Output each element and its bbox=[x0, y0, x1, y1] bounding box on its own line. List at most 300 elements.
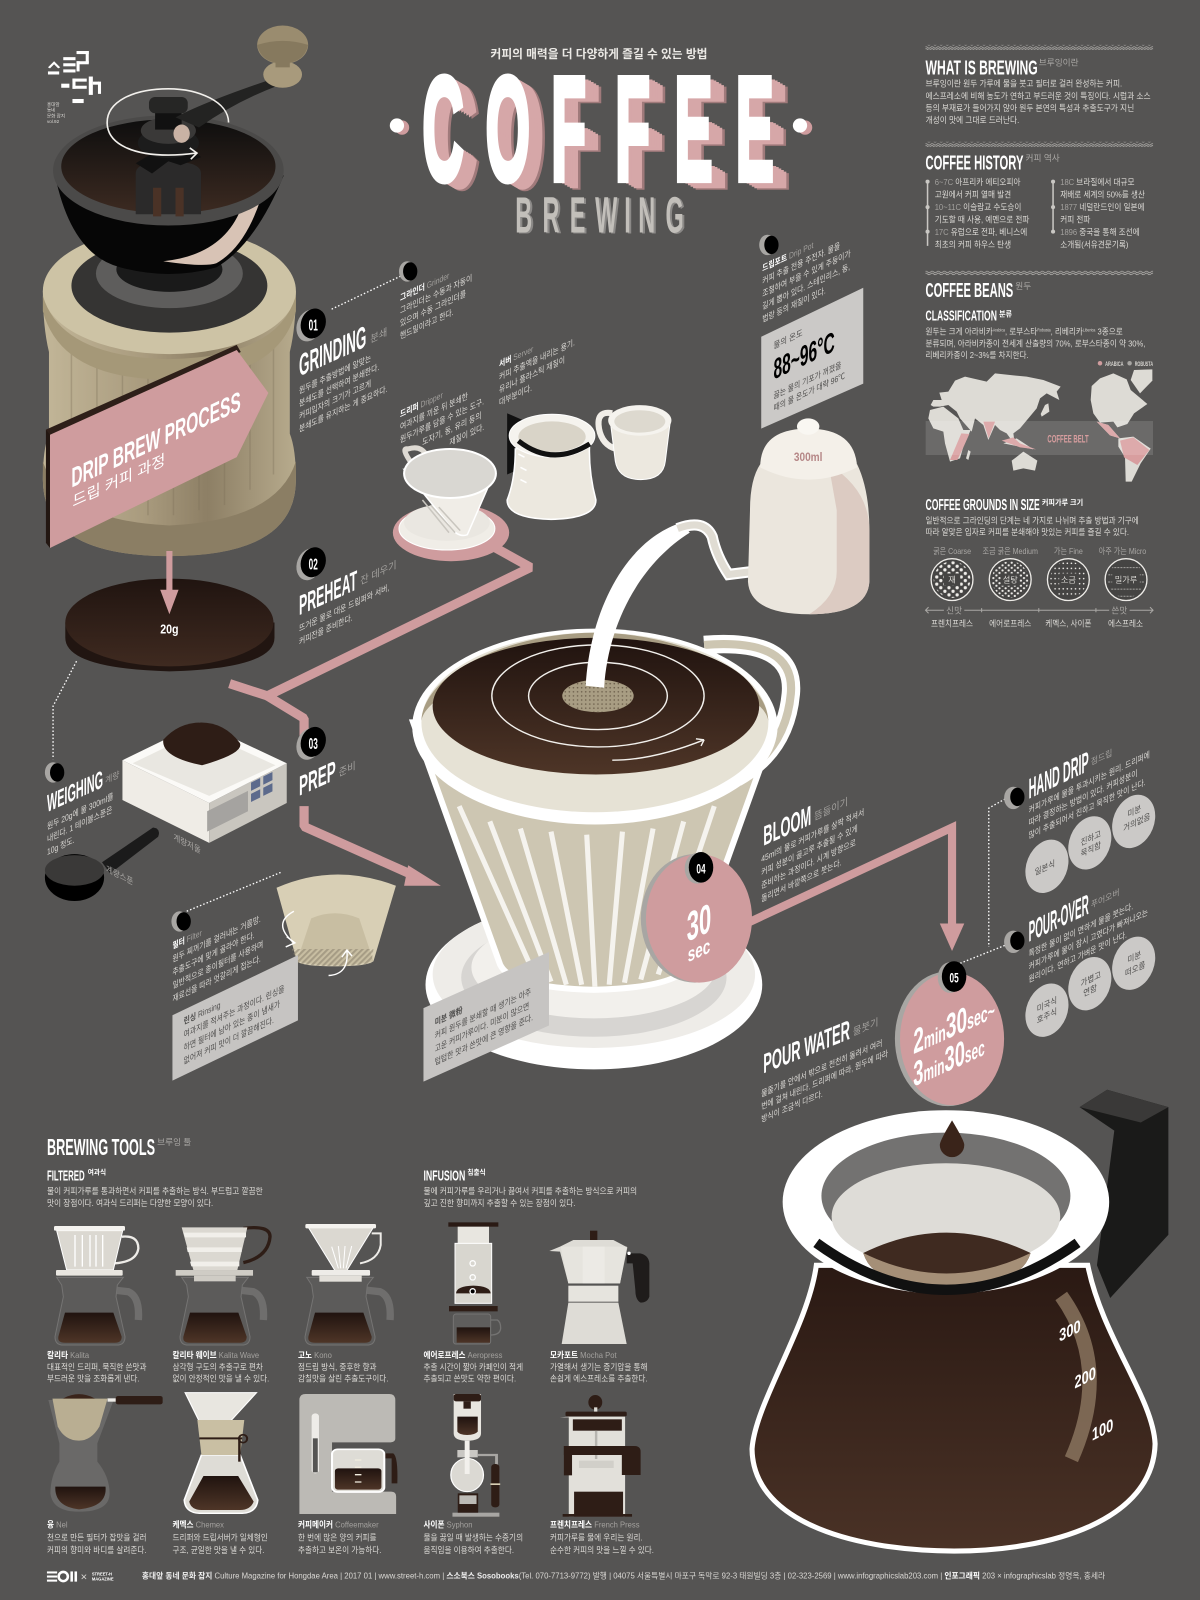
panel: coffee history: 최초의 커피 하우스 탄생 bbox=[935, 239, 1011, 250]
step 02 marker: 02 bbox=[309, 556, 318, 573]
caption: aeropress: Aeropress bbox=[466, 1351, 502, 1360]
panel: coffee history: 소개됨(서유견문기록) bbox=[1060, 239, 1129, 250]
ground coffee disc bbox=[65, 579, 274, 671]
main dripper illustration bbox=[412, 522, 791, 1069]
text: dripper note: 원두가루를 담을 수 있는 도구. bbox=[400, 396, 484, 445]
text: filter: 필터 bbox=[172, 935, 185, 951]
footer logo: × bbox=[81, 1572, 87, 1584]
logo: street-h: 동네 bbox=[47, 107, 55, 114]
title: coffee extrusion: COFFEE bbox=[430, 49, 781, 217]
bubbles: hand drip: 묵직함 bbox=[1081, 839, 1101, 859]
text: server note: 커피 추출액을 내리는 용기. bbox=[499, 336, 575, 382]
panel: what is brewing: 개성이 맛에 그대로 드러난다. bbox=[926, 114, 1019, 125]
grinder marker bbox=[399, 261, 417, 282]
text: bloom: 45ml의 물로 커피가루를 살짝 적셔서 bbox=[761, 806, 864, 864]
caption: chemex: 드리퍼와 드립서버가 일체형인 bbox=[172, 1532, 268, 1542]
bubbles: pour-over: 호주식 bbox=[1037, 1006, 1057, 1026]
heading: grinding bbox=[299, 319, 387, 383]
drip kettle illustration: 300ml bbox=[794, 450, 822, 464]
heading: pour-over: 푸어오버 bbox=[1091, 887, 1119, 910]
heading: bloom: 뜸들이기 bbox=[814, 796, 848, 823]
dotted connector: weighing bbox=[53, 661, 77, 759]
step 04 timer: 30 sec bbox=[641, 852, 752, 983]
panel: coffee history: 브라질에서 대규모 bbox=[1076, 177, 1135, 187]
heading: hand drip: 점드립 bbox=[1091, 746, 1112, 767]
tool: kalita bbox=[54, 1226, 139, 1345]
bubbles: pour-over: 가볍고 bbox=[1081, 969, 1101, 989]
crank handle bbox=[176, 80, 278, 128]
panel: what is brewing: 에스프레소에 비해 농도가 연하고 부드러운 것이 특징이다. 시럽과 소스 bbox=[926, 90, 1151, 101]
panel: coffee history: 18C bbox=[1060, 178, 1076, 187]
kitchen scale: 계량저울 bbox=[173, 832, 201, 856]
text: filtered: 여과식 bbox=[88, 1167, 106, 1176]
tool: kono bbox=[305, 1224, 390, 1345]
caption: chemex: 구조, 균일한 맛을 낼 수 있다. bbox=[172, 1545, 264, 1555]
measuring spoon bbox=[45, 828, 159, 901]
grinder base cylinder bbox=[43, 228, 296, 556]
panel: what is brewing: WHAT IS BREWING bbox=[926, 57, 1038, 79]
bubbles: pour-over: 미분 bbox=[1128, 949, 1141, 965]
footer logo: MAGAZINE bbox=[92, 1577, 114, 1582]
text: infusion: 침출식 bbox=[467, 1167, 486, 1176]
panel: what is brewing: 등의 부재료가 들어가지 않아 원두 본연의 특성과 추출도구가 지닌 bbox=[926, 102, 1134, 113]
text: infusion: 깊고 진한 향미까지 추출할 수 있는 장점이 있다. bbox=[423, 1198, 575, 1208]
heading: bloom: BLOOM bbox=[763, 801, 811, 853]
panel: water temperature: 때의 물 온도가 대략 96℃ bbox=[773, 370, 845, 413]
step 03 marker bbox=[292, 723, 330, 763]
bubbles: pour-over bbox=[1018, 930, 1163, 1043]
caption: kono: 고노 bbox=[298, 1351, 312, 1360]
text: server note: Server bbox=[511, 344, 533, 364]
text: grinder note: 있으며 수동 그라인더를 bbox=[400, 288, 466, 329]
panel: micro grounds: 커피 원두를 분쇄할 때 생기는 아주 bbox=[435, 986, 531, 1041]
caption: french press: French Press bbox=[592, 1520, 640, 1530]
banner: drip brew process: DRIP BREW PROCESS bbox=[71, 386, 241, 494]
text: drip pot note: 법랑 등의 재질이 있다. bbox=[762, 285, 826, 325]
grind sizes: 신맛 bbox=[946, 605, 962, 615]
step 05 timer: 3min30sec bbox=[913, 1023, 985, 1094]
caption: french press: 프렌치프레스 bbox=[550, 1519, 593, 1530]
heading: hand drip bbox=[1029, 746, 1112, 806]
panel: rinsing: 여과지를 적셔주는 과정이다. 린싱을 bbox=[184, 983, 284, 1040]
panel: rinsing: 린싱 bbox=[184, 1010, 196, 1027]
panel: coffee grounds in size: 따라 알맞은 입자로 커피를 분쇄해야 맛있는 커피를 즐길 수 있다. bbox=[926, 527, 1129, 537]
panel: coffee history: 네덜란드인이 일본에 bbox=[1079, 202, 1145, 212]
bubbles: hand drip: 일본식 bbox=[1035, 858, 1055, 878]
step 04 timer: 30 sec: 04 bbox=[696, 861, 706, 877]
bloom centre bbox=[562, 680, 634, 712]
text: grinding: 분쇄도를 유지하는 게 중요하다. bbox=[299, 383, 387, 434]
step 04 timer: 30 sec: 30 bbox=[687, 895, 711, 951]
world map: coffee belt: COFFEE BELT bbox=[1047, 434, 1089, 446]
text: filter: 일반적으로 종이필터를 사용하며 bbox=[172, 938, 263, 991]
wooden knob bbox=[257, 26, 308, 88]
caption: nel: 융 bbox=[47, 1520, 54, 1530]
text: bloom: 돌리면서 바깥쪽으로 붓는다. bbox=[761, 856, 841, 904]
pour-over marker bbox=[1004, 931, 1024, 953]
panel: micro grounds: 고운 커피가루이다. 미분이 많으면 bbox=[435, 1000, 529, 1054]
heading: preheat bbox=[299, 559, 397, 622]
hand drip marker bbox=[1004, 787, 1024, 809]
panel: rinsing: 하면 필터에 남아 있는 종이 냄새가 bbox=[184, 998, 281, 1053]
coffee drop bbox=[940, 1120, 964, 1157]
heading: bloom bbox=[763, 796, 848, 853]
caption: kalita: 대표적인 드리퍼, 묵직한 쓴맛과 bbox=[47, 1361, 147, 1372]
text: filter: 원두 찌꺼기를 걸러내는 거름망. bbox=[172, 913, 261, 964]
heading: weighing: WEIGHING bbox=[47, 766, 103, 818]
heading: brewing tools: BREWING TOOLS bbox=[47, 1134, 155, 1160]
grind sizes bbox=[926, 545, 1153, 629]
grind sizes: 프렌치프레스 bbox=[931, 618, 974, 629]
title block bbox=[390, 46, 812, 245]
caption: kono: 감칠맛을 살린 추출도구이다. bbox=[298, 1373, 388, 1384]
panel: coffee beans classification: 분류되며, 아라비카종이 전세계 산출량의 70%, 로부스타종이 약 30%, bbox=[926, 338, 1145, 349]
text: preheat: 커피잔을 준비한다. bbox=[299, 612, 352, 647]
bubbles: hand drip: 미분 bbox=[1128, 803, 1141, 819]
dripper handle inner bbox=[704, 644, 791, 778]
coffee cup bbox=[598, 405, 671, 480]
step 05 timer bbox=[895, 961, 1004, 1106]
caption: coffeemaker: 커피메이커 bbox=[298, 1519, 333, 1530]
panel: coffee grounds in size bbox=[926, 497, 1139, 537]
heading: brewing tools: 브루잉 툴 bbox=[157, 1136, 191, 1147]
panel: coffee beans classification bbox=[926, 270, 1153, 360]
panel: coffee history: 17C bbox=[935, 228, 951, 237]
tool: nel bbox=[48, 1394, 163, 1512]
panel: coffee beans classification: 분류 bbox=[999, 310, 1013, 318]
panel: coffee history: 6~7C bbox=[935, 178, 955, 187]
heading: weighing bbox=[47, 766, 119, 818]
panel: micro grounds bbox=[423, 952, 549, 1082]
panel: what is brewing: 브루잉이란 bbox=[1039, 56, 1079, 67]
arrow head: prep bbox=[404, 865, 441, 886]
glass server bbox=[507, 413, 596, 519]
text: pour water: 방식이 조금씩 다르다. bbox=[761, 1088, 823, 1125]
panel: rinsing bbox=[172, 955, 298, 1081]
caption: syphon: 움직임을 이용하여 추출한다. bbox=[423, 1545, 514, 1555]
text: preheat: 뜨거운 물로 대운 드립퍼와 서버, bbox=[299, 581, 389, 634]
caption: kalita: 칼리타 bbox=[47, 1350, 68, 1360]
panel: coffee history: COFFEE HISTORY bbox=[926, 152, 1024, 174]
bubbles: hand drip: 진하고 bbox=[1081, 828, 1101, 848]
panel: coffee history: 중국을 통해 조선에 bbox=[1079, 227, 1140, 237]
heading: prep bbox=[299, 756, 356, 803]
caption: nel: Nel bbox=[54, 1520, 68, 1530]
panel: water temperature: 끓는 물의 기포가 꺼졌을 bbox=[773, 359, 841, 401]
text: grinder note: 핸드밀이라고 한다. bbox=[400, 306, 454, 341]
bubbles: hand drip: 거의없음 bbox=[1123, 811, 1151, 834]
caption: syphon: 사이폰 bbox=[423, 1519, 445, 1530]
title: brewing: BREWING bbox=[515, 188, 684, 244]
panel: coffee grounds in size: 일반적으로 그라인딩의 단계는 네 가지로 나뉘며 추출 방법과 기구에 bbox=[926, 515, 1139, 526]
subtitle: 커피의 매력을 더 다양하게 즐길 수 있는 방법 bbox=[491, 47, 707, 61]
coarse grind bbox=[931, 559, 973, 601]
bubbles: pour-over: 연함 bbox=[1083, 982, 1097, 999]
text: grinder note: Grinder bbox=[425, 271, 450, 292]
bubbles: pour-over: 떠오름 bbox=[1125, 959, 1146, 979]
caption: coffeemaker: Coffeemaker bbox=[333, 1520, 379, 1530]
text: server note: 서버 bbox=[499, 353, 511, 369]
caption: french press: 커피가루를 물에 우리는 원리. bbox=[550, 1533, 643, 1542]
caption: aeropress: 추출 시간이 짧아 카페인이 적게 bbox=[423, 1361, 523, 1372]
micro grind bbox=[1105, 559, 1147, 601]
grind sizes: 케멕스, 사이폰 bbox=[1045, 618, 1092, 629]
arrow head: pour bbox=[940, 923, 964, 951]
caption: kono: 점드립 방식, 중후한 향과 bbox=[298, 1361, 377, 1372]
heading: pour water: 물붓기 bbox=[853, 1016, 878, 1039]
panel: coffee history bbox=[926, 142, 1153, 250]
panel: coffee history: 고원에서 커피 열매 발견 bbox=[935, 189, 1011, 200]
tool: syphon bbox=[451, 1394, 500, 1517]
filter marker bbox=[171, 911, 191, 932]
text: infusion bbox=[423, 1167, 637, 1208]
text: filter: Filter bbox=[185, 928, 202, 945]
footer logo bbox=[47, 1571, 114, 1584]
title: coffee extrusion: COFFEE bbox=[440, 55, 791, 223]
text: dripper note: 도자기, 동, 유리 등의 bbox=[422, 409, 481, 447]
panel: coffee beans classification: 3종으로 bbox=[1095, 327, 1123, 337]
pouring water stream bbox=[586, 522, 690, 688]
text: weighing: 내린다. 1 테이블스푼은 bbox=[47, 804, 112, 844]
grind sizes: 에어로프레스 bbox=[989, 618, 1032, 629]
caption: chemex: Chemex bbox=[193, 1520, 224, 1530]
panel: coffee beans classification: , 리베리카 bbox=[1051, 327, 1083, 337]
heading: grinding: GRINDING bbox=[299, 319, 366, 383]
map legend: ARABICA bbox=[1105, 361, 1124, 368]
text: filtered: 맛이 장점이다. 여과식 드리퍼는 다양한 모양이 있다. bbox=[47, 1198, 213, 1208]
heading: prep: PREP bbox=[299, 756, 336, 803]
pink path: prep to brewer bbox=[267, 696, 418, 878]
logo: street-h: 문화 잡지 bbox=[47, 112, 65, 119]
coffee surface bbox=[433, 638, 759, 774]
panel: coffee history: 1896 bbox=[1060, 228, 1079, 237]
medium grind bbox=[989, 559, 1031, 601]
step 01 marker: 01 bbox=[309, 318, 318, 335]
text: grinding: 분쇄도를 선택하여 분쇄한다. bbox=[299, 361, 379, 409]
title: coffee extrusion: COFFEE bbox=[437, 53, 789, 221]
panel: coffee beans classification: CLASSIFICATION bbox=[926, 308, 997, 324]
cone bbox=[413, 722, 777, 990]
text: dripper note: 드리퍼 bbox=[400, 401, 419, 419]
panel: coffee grounds in size: 커피가루 크기 bbox=[1042, 498, 1083, 507]
title: coffee: COFFEE bbox=[422, 46, 774, 211]
dripper on saucer bbox=[393, 448, 509, 561]
caption: kono: Kono bbox=[312, 1351, 332, 1360]
text: filtered bbox=[47, 1167, 263, 1208]
panel: micro grounds: 미분 微粉 bbox=[435, 1004, 463, 1028]
caption: mocha pot: 모카포트 bbox=[550, 1350, 579, 1360]
text: weighing: 원두 20g에 물 300ml를 bbox=[47, 791, 113, 832]
step 02 marker bbox=[292, 544, 330, 584]
logo: street-h: 홍대앞 bbox=[47, 101, 60, 108]
step 05 timer: 2min30sec~ bbox=[913, 986, 995, 1062]
step 01 marker bbox=[292, 305, 330, 345]
text: drip pot note: 드립포트 bbox=[762, 251, 788, 274]
title: coffee extrusion: COFFEE bbox=[432, 50, 783, 218]
grind sizes: 가는 Fine bbox=[1054, 546, 1083, 556]
text: hand drip: 커피가루에 물을 투과시키는 원리. 드리퍼에 bbox=[1029, 750, 1150, 815]
coffee grinder illustration bbox=[43, 26, 308, 556]
grind sizes: 조금 굵은 Medium bbox=[983, 546, 1038, 556]
heading: hand drip: HAND DRIP bbox=[1029, 746, 1089, 806]
text: drip pot note: 조절하여 부을 수 있게 주둥이가 bbox=[762, 247, 851, 299]
carafe highlight bbox=[1061, 1296, 1090, 1459]
heading: pour water bbox=[763, 1015, 878, 1080]
caption: kalita wave: 칼리타 웨이브 bbox=[172, 1350, 217, 1360]
text: grinding: 원두를 추출방법에 알맞는 bbox=[299, 352, 371, 396]
caption: kalita: Kalita bbox=[68, 1351, 90, 1360]
text: pour-over: 원리이다. 연하고 가벼운 맛이 난다. bbox=[1029, 929, 1127, 985]
panel: what is brewing: 브루잉이란 원두 가루에 물을 붓고 필터로 걸러 완성하는 커피. bbox=[926, 78, 1122, 89]
measuring spoon: 계량스푼 bbox=[106, 863, 133, 887]
text: filter: 추출도구에 맞게 골라야 한다. bbox=[172, 929, 255, 978]
text: hand drip: 많이 추출되어서 진하고 묵직한 맛이 난다. bbox=[1029, 776, 1146, 841]
panel: coffee beans classification: 원두 bbox=[1015, 281, 1031, 291]
heading: preheat: PREHEAT bbox=[299, 565, 357, 622]
grinder bowl bbox=[53, 97, 284, 274]
step 05 timer: 05 bbox=[949, 971, 959, 987]
caption: kalita: 부드러운 맛을 조화롭게 낸다. bbox=[47, 1373, 140, 1384]
text: weighing: 10g 정도. bbox=[47, 834, 74, 857]
panel: coffee beans classification: Robusta bbox=[1037, 328, 1051, 333]
text: grinding: 커피입자의 크기가 고르게 bbox=[299, 377, 371, 422]
grind sizes: 쓴맛 bbox=[1111, 605, 1127, 615]
text: bloom: 커피 성분이 골고루 추출될 수 있게 bbox=[761, 822, 858, 878]
text: drip pot note: 길게 뽑아 있다. 스테인리스, 동, bbox=[762, 261, 850, 312]
bubbles: pour-over: 미국식 bbox=[1037, 994, 1057, 1014]
text: pour-over: 커피가루에 물이 잠시 고였다가 빠져나오는 bbox=[1029, 906, 1148, 972]
heading: prep: 준비 bbox=[339, 760, 356, 780]
grind sizes: 아주 가는 Micro bbox=[1099, 545, 1147, 556]
banner: drip brew process: 드립 커피 과정 bbox=[72, 451, 165, 511]
panel: rinsing: Rinsing bbox=[196, 1000, 221, 1021]
panel: coffee grounds in size: COFFEE GROUNDS IN SIZE bbox=[926, 497, 1040, 514]
caption: mocha pot: 가열해서 생기는 증기압을 통해 bbox=[550, 1361, 647, 1372]
panel: coffee history: 아프리카 에티오피아 bbox=[955, 177, 1021, 187]
tool: chemex bbox=[184, 1393, 258, 1513]
text: drip pot note: 커피 추출 전용 주전자. 물을 bbox=[762, 240, 840, 286]
banner: drip brew process bbox=[46, 345, 268, 548]
tool: french press bbox=[560, 1395, 641, 1517]
grind sizes: 에스프레소 bbox=[1108, 619, 1143, 629]
text: dripper note: 재질이 있다. bbox=[449, 421, 484, 448]
map legend: ROBUSTA bbox=[1135, 361, 1153, 368]
text: drip pot note: Drip Pot bbox=[787, 240, 814, 262]
footer logo: STREET-H bbox=[92, 1572, 112, 1577]
paper filter illustration bbox=[277, 874, 396, 976]
micro grind: 밀가루 bbox=[1115, 576, 1138, 585]
logo: street-h bbox=[47, 51, 101, 124]
panel: coffee history: 유럽으로 전파, 베니스에 bbox=[951, 227, 1027, 237]
coarse grind: 재 bbox=[948, 576, 956, 585]
panel: coffee beans classification: Liberica bbox=[1083, 328, 1096, 333]
caption: kalita wave: 없이 안정적인 맛을 낼 수 있다. bbox=[172, 1373, 269, 1384]
tool: mocha pot bbox=[549, 1231, 649, 1344]
heading: preheat: 잔 데우기 bbox=[360, 559, 397, 588]
caption: kalita wave: Kalita Wave bbox=[217, 1351, 260, 1360]
map legend bbox=[1098, 361, 1153, 368]
panel: water temperature bbox=[761, 288, 863, 429]
footer credits: 홍대앞 동네 문화 잡지 Culture Magazine for Hongdae Area | 2017 01 | www.street-h.com | 스소북스 Sosobooks(Tel. 070-7713-9772) 발행 | 04075 서울특별시 마포구 독막로 92-3 태원빌딩 3층 | 02-323-2569 | www.infographicslab203.com | 인포그래픽 203 × infographicslab 정영옥, 홍세라 bbox=[142, 1571, 1106, 1581]
weighing marker bbox=[45, 762, 64, 783]
arrow: grinder to grounds bbox=[160, 551, 179, 614]
text: pour water: 물줄기를 안에서 밖으로 천천히 돌려서 여러 bbox=[761, 1037, 882, 1099]
carafe handle bbox=[1080, 1090, 1168, 1298]
drip kettle illustration bbox=[678, 418, 869, 614]
panel: what is brewing bbox=[926, 45, 1153, 125]
dotted connector: filter bbox=[187, 872, 281, 911]
tool: coffeemaker bbox=[299, 1394, 397, 1514]
panel: coffee beans classification: , 로부스타 bbox=[1005, 327, 1038, 337]
panel: coffee history: 커피 역사 bbox=[1026, 153, 1060, 163]
kettle spout bbox=[678, 525, 753, 574]
logo: street-h: vol.92 bbox=[47, 119, 60, 124]
bubbles: hand drip bbox=[1018, 788, 1163, 900]
panel: coffee history: 이슬람교 수도승이 bbox=[963, 202, 1021, 212]
carafe funnel rim bbox=[783, 1110, 1109, 1294]
caption: aeropress: 추출되고 쓴맛도 약한 편이다. bbox=[423, 1373, 516, 1384]
text: filtered: 물이 커피가루를 통과하면서 커피를 추출하는 방식. 부드럽고 깔끔한 bbox=[47, 1185, 263, 1196]
panel: coffee history: 기도할 때 사용, 예멘으로 전파 bbox=[935, 214, 1030, 225]
panel: coffee history: 재배로 세계의 50%를 생산 bbox=[1060, 189, 1145, 200]
caption: nel: 커피의 향미와 바디를 살려준다. bbox=[47, 1545, 147, 1555]
grind sizes: 굵은 Coarse bbox=[933, 546, 972, 556]
text: server note: 대부분이다. bbox=[499, 382, 532, 408]
carafe volume marks: 200 bbox=[1074, 1362, 1096, 1393]
panel: coffee history: 커피 전파 bbox=[1060, 214, 1091, 225]
step 03 marker: 03 bbox=[309, 736, 318, 753]
medium grind: 설탕 bbox=[1003, 575, 1018, 585]
panel: coffee history: 10~11C bbox=[935, 203, 963, 212]
caption: coffeemaker: 추출하고 보온이 가능하다. bbox=[298, 1545, 381, 1555]
text: bloom: 준비하는 과정이다. 시계 방향으로 bbox=[761, 836, 856, 891]
caption: coffeemaker: 한 번에 많은 양의 커피를 bbox=[298, 1532, 377, 1542]
title: coffee extrusion: COFFEE bbox=[427, 48, 778, 216]
caption: french press: 순수한 커피의 맛을 느낄 수 있다. bbox=[550, 1545, 654, 1555]
text: dripper note: Dripper bbox=[419, 390, 443, 411]
ground coffee disc: 20g bbox=[160, 622, 179, 637]
text: infusion: INFUSION bbox=[423, 1169, 465, 1185]
text: grinder note: 그라인더 bbox=[400, 281, 425, 303]
text: dripper note: 여과지를 끼운 뒤 분쇄한 bbox=[400, 390, 468, 432]
text: infusion: 물에 커피가루를 우리거나 끓여서 커피를 추출하는 방식으로 커피의 bbox=[423, 1185, 637, 1196]
carafe body bbox=[752, 1265, 1155, 1551]
saucer bbox=[426, 900, 762, 1069]
dotted connector: methods bbox=[960, 799, 1006, 963]
dripper handle bbox=[704, 644, 791, 778]
step 04 timer: 30 sec: sec bbox=[688, 934, 710, 967]
carafe volume marks: 300 bbox=[1059, 1315, 1081, 1346]
pink path: preheat bbox=[230, 546, 531, 696]
tool: aeropress bbox=[448, 1222, 501, 1344]
rim and inner wall bbox=[412, 629, 778, 824]
panel: water temperature: 물의 온도 bbox=[773, 327, 803, 351]
text: filtered: FILTERED bbox=[47, 1169, 85, 1185]
text: drip pot note bbox=[759, 222, 851, 325]
caption: syphon: Syphon bbox=[445, 1520, 472, 1530]
caption: chemex: 케멕스 bbox=[172, 1519, 194, 1530]
caption: nel: 천으로 만든 필터가 잡맛을 걸러 bbox=[47, 1532, 147, 1542]
spiral pour rings bbox=[492, 645, 704, 760]
caption: aeropress: 에어로프레스 bbox=[423, 1350, 466, 1360]
text: filter: 재료선을 따라 엇갈리게 접는다. bbox=[172, 953, 261, 1004]
heading: grinding: 분쇄 bbox=[370, 326, 387, 346]
text: grinder note: 그라인더는 수동과 자동이 bbox=[400, 272, 472, 316]
text: pour water: 번에 걸쳐 내린다. 드리퍼에 따라, 원두에 따라 bbox=[761, 1047, 888, 1112]
caption: mocha pot: Mocha Pot bbox=[578, 1351, 617, 1360]
panel: coffee history: 1877 bbox=[1060, 203, 1079, 212]
tool: kalita wave bbox=[176, 1227, 270, 1345]
